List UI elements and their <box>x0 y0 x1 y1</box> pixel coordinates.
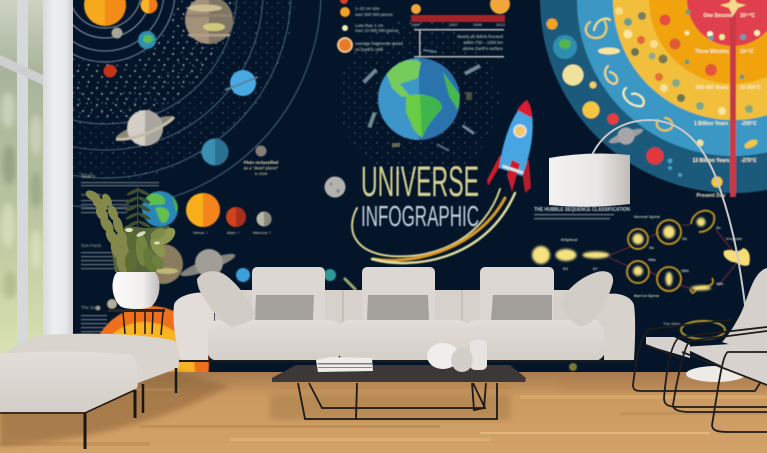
debris key text <box>355 6 404 52</box>
panel: space debris stats <box>337 0 510 58</box>
row: mercury large <box>256 212 272 226</box>
planet: sun <box>84 0 126 26</box>
labels: Barred Spiral <box>634 293 659 298</box>
debris note: above Earth's surface <box>463 46 504 51</box>
planet: jupiter <box>185 0 233 44</box>
white window column <box>43 0 74 345</box>
irregular galaxy <box>724 248 750 266</box>
debris key text: Less than 1 cm <box>355 23 384 28</box>
satellites <box>362 49 481 152</box>
vases <box>427 340 487 372</box>
throw pillow right <box>560 271 613 327</box>
planet: venus <box>140 0 158 14</box>
debris key text: over 500 000 pieces <box>355 12 393 17</box>
elliptical galaxies <box>532 246 610 264</box>
labels: SBb <box>681 268 690 273</box>
band labels: One Second <box>703 13 733 19</box>
planet: neptune lower <box>324 269 336 281</box>
debris timeline: 2009 <box>473 22 483 27</box>
floor <box>0 372 767 453</box>
band labels: 300 000 Years <box>696 85 729 91</box>
planet: uranus <box>225 70 258 96</box>
plant pot <box>112 272 160 309</box>
center and right fronds <box>125 225 178 274</box>
seats <box>207 320 341 361</box>
text: pluto note line two: as a "dwarf planet" <box>244 166 279 170</box>
spiral cores <box>632 218 711 290</box>
debris key text: over 13 000 000 pieces <box>355 28 399 33</box>
sofa base line <box>178 360 636 362</box>
grey pillows <box>255 295 314 320</box>
debris timeline: 2007 <box>449 22 459 27</box>
band labels: Three Minutes <box>695 49 729 55</box>
back ottoman <box>0 334 179 413</box>
labels <box>561 214 743 298</box>
panel: hubble classification <box>532 207 750 371</box>
lamp <box>549 120 745 305</box>
fern <box>125 187 151 237</box>
text block: stats intro: Stars <box>81 174 95 180</box>
chair cushions <box>646 337 690 358</box>
labels: E7 <box>593 266 599 271</box>
back cushions <box>252 267 325 322</box>
text block: stats intro: Sun Facts <box>81 243 102 248</box>
band: yellow band clusters <box>615 7 760 115</box>
band labels: -200°C <box>741 121 757 127</box>
satellite lower <box>344 278 356 290</box>
row label: venus: Venus ♀ <box>193 230 208 235</box>
chair frames <box>633 320 767 432</box>
band labels: Present Day <box>697 193 726 199</box>
debris note: within 750 – 1500 km <box>463 40 504 45</box>
sub text <box>534 214 614 219</box>
debris key text: Average fragments speed <box>355 41 404 46</box>
planet: saturn lower <box>180 248 236 277</box>
debris note <box>457 34 504 51</box>
row: venus large <box>186 193 220 227</box>
row: earth large <box>142 191 180 227</box>
big bang star <box>720 0 746 16</box>
throw pillow left <box>197 271 256 327</box>
rocket exhaust swoosh <box>352 189 515 263</box>
labels: SBa <box>648 257 657 262</box>
the stars label and disc <box>569 321 725 371</box>
center timeline bar <box>730 0 736 197</box>
debris dot field <box>359 39 479 159</box>
text block: stats intro: Solar Facts <box>81 192 101 197</box>
band labels: 1 Billion Years <box>694 121 728 127</box>
books on table <box>316 357 373 372</box>
row label: mars: Mars ♂ <box>227 230 240 235</box>
left arm <box>173 293 214 360</box>
title: universe: UNIVERSE <box>361 158 479 206</box>
planet: moon <box>324 176 346 198</box>
planet: saturn <box>114 110 176 146</box>
band labels: -270°C <box>741 158 757 164</box>
band labels: 10²⁷°C <box>740 13 755 19</box>
band labels: 10⁹°C <box>740 49 754 55</box>
panel: big bang timeline circle <box>540 0 767 199</box>
sofa backrest <box>215 290 600 335</box>
coffee table <box>272 365 526 419</box>
rocket <box>487 100 533 193</box>
saturn grey on band <box>608 126 644 146</box>
debris note: Nearly all debris focused <box>457 34 504 39</box>
lamp base <box>686 366 746 382</box>
window with garden view <box>0 0 44 362</box>
text block: stats intro <box>81 174 159 332</box>
labels: Sb <box>682 236 688 241</box>
lamp shade <box>549 154 630 207</box>
planet: jupiter lower <box>155 244 184 285</box>
debris timeline: 2013 <box>496 22 506 27</box>
band labels: 10 000°C <box>740 85 761 91</box>
planet: mars <box>104 64 116 78</box>
labels: Normal Spiral <box>634 214 660 219</box>
right arm <box>592 294 635 360</box>
text: pluto note: Pluto reclassified <box>244 160 279 165</box>
labels: Elliptical <box>561 237 577 242</box>
small moons <box>96 299 117 310</box>
plant leaves <box>84 187 178 275</box>
labels: Irregular <box>726 236 743 241</box>
debris key text: on Earth's orbit <box>355 47 384 52</box>
debris key dots <box>337 0 353 53</box>
text: pluto note line three: in 2006 <box>255 172 267 176</box>
labels: Sc <box>716 225 722 230</box>
panel: solar system orbits <box>73 0 322 208</box>
left frond <box>84 188 132 275</box>
the stars label and disc: The Stars <box>663 321 680 326</box>
band: outer objects <box>546 18 682 177</box>
debris timeline <box>411 0 510 58</box>
chairs <box>633 268 767 432</box>
planet: neptune <box>202 138 228 166</box>
planet: earth small <box>138 31 156 49</box>
debris key text: 1–10 cm size <box>355 6 380 11</box>
sun large bottom <box>91 306 209 424</box>
heading: THE HUBBLE SEQUENCE CLASSIFICATION <box>534 207 630 213</box>
planet: uranus lower <box>236 268 250 282</box>
labels: SBc <box>716 281 725 286</box>
lamp arc <box>592 120 745 305</box>
wall mural <box>73 0 767 372</box>
planet: pluto <box>256 146 266 156</box>
connectors <box>610 225 736 288</box>
debris timeline: 1964 <box>411 22 421 27</box>
planet: mercury <box>112 28 122 38</box>
text block: stats intro: The Sun <box>81 305 99 310</box>
earth large with satellites <box>378 58 460 140</box>
spirals <box>627 211 714 293</box>
front ottoman <box>0 351 138 449</box>
band: galaxies <box>586 18 759 187</box>
title: infographic: INFOGRAPHIC <box>361 201 479 233</box>
sofa <box>173 267 636 362</box>
band labels <box>693 13 761 199</box>
plant stand <box>108 309 165 335</box>
labels: Sa <box>649 245 655 250</box>
row label: mercury: Mercury ☿ <box>253 230 272 235</box>
row: mars large <box>226 207 246 227</box>
labels: E3 <box>563 266 569 271</box>
band labels: 13 Billion Years <box>693 158 730 164</box>
plant mass <box>110 226 170 272</box>
